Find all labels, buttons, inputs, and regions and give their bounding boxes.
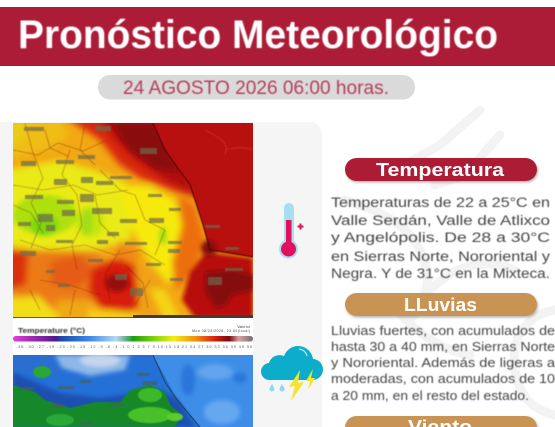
text: temperature forecast: y Angelópolis. De 28 a 30°C [331,230,550,245]
text: temperature forecast: Valle Serdán, Valle de Atlixco [331,213,550,228]
SW orange-red [5,250,110,312]
east orange strip [172,195,205,290]
rainfall map [13,353,253,427]
text: rain forecast: a 20 mm, en el resto del estado. [331,389,529,403]
colour scale [13,336,253,342]
top left orange-yellow [13,123,72,159]
heading: Lluvias: LLuvias [404,295,477,315]
heading: Temperatura: Temperatura [376,160,505,180]
centre-right yellow lobe [120,185,182,285]
title banner [0,7,555,66]
background watermark [345,110,555,415]
icon: storm cloud [261,346,323,401]
heading: Temperatura [345,158,537,181]
text: rain forecast: Lluvias fuertes, con acumulados de [331,324,555,338]
text: rain forecast: moderadas, con acumulados de 10 [331,372,555,386]
legend: Valid for [237,325,251,329]
red band around the north [67,123,194,202]
heading: Lluvias [345,293,537,316]
text: temperature forecast: en Sierras Norte, Nororiental y [331,249,550,264]
title: Pronóstico Meteorológico [18,13,498,57]
text: temperature forecast: Negra. Y de 31°C en la Mixteca. [331,266,550,281]
heading: Viento [345,416,537,427]
legend [13,318,253,355]
temperature map [13,123,253,318]
text: rain forecast [331,324,555,403]
text: temperature forecast [331,195,550,281]
sea [153,123,253,257]
legend title: Temperature (°C) [18,326,86,335]
panel: maps background [0,122,322,427]
legend: Mon 08/24/2026, 23:00(local) [192,329,250,333]
yellow belt [5,160,135,250]
text: temperature forecast: Temperaturas de 22 a 25°C en [331,195,550,210]
legend: -38 -30 -27 -19 -23 -20 -15 -12 -9 -6 -3 -1 0 1 3 5 7 9 10 15 18 21 24 27 30 33 36 39 45 50 [16,345,252,349]
south red blob [88,258,152,312]
icon: thermometer [279,203,304,258]
south-centre streaks [129,262,169,310]
date pill: 24 AGOSTO 2026 06:00 horas. [123,78,389,99]
text: rain forecast: hasta 30 a 40 mm, en Sierras Norte [331,340,555,354]
text: rain forecast: y Nororiental. Además de ligeras a [331,356,555,370]
